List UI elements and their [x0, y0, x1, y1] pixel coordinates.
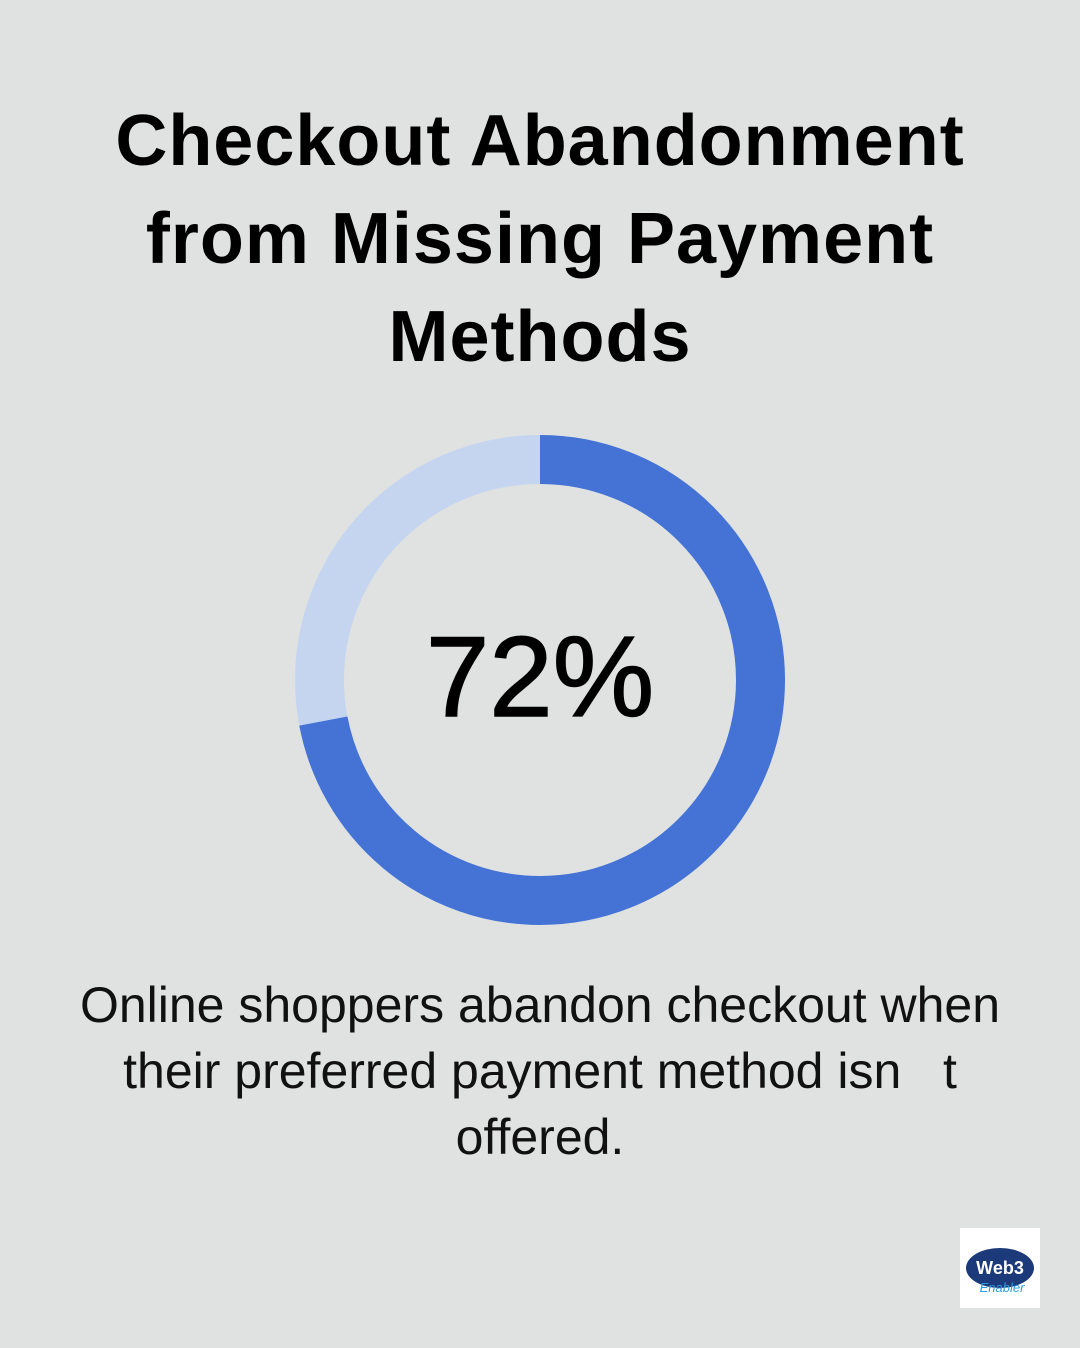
title: Methods: [388, 297, 691, 377]
title: [115, 101, 965, 377]
title: from Missing Payment: [146, 199, 934, 279]
value: 72%: [426, 614, 654, 741]
description: their preferred payment method isn t: [123, 1043, 957, 1099]
logo: Enabler: [980, 1280, 1025, 1295]
description: offered.: [456, 1109, 624, 1165]
logo: [960, 1228, 1040, 1308]
description: [80, 977, 1000, 1165]
donut chart: [295, 435, 785, 925]
logo: Web3: [976, 1258, 1024, 1278]
description: Online shoppers abandon checkout when: [80, 977, 1000, 1033]
title: Checkout Abandonment: [115, 101, 965, 181]
